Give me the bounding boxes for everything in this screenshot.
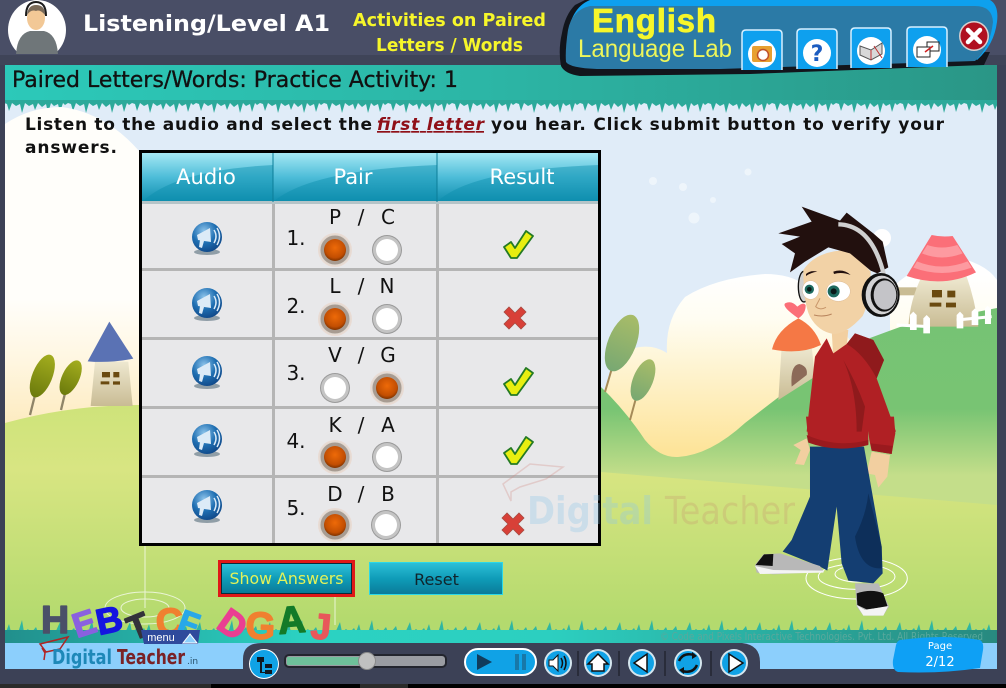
menu tab: menu: [147, 632, 175, 644]
pair letters and numbers: /: [358, 274, 365, 298]
icon: previous: [628, 649, 656, 677]
top teal title band: [5, 65, 997, 100]
table header: Audio: [176, 165, 236, 189]
icon: folder clock: [748, 40, 776, 68]
icon: close: [959, 21, 989, 51]
logo: Digital Teacher: [40, 637, 198, 669]
panel: English Language Lab toolbar: [560, 0, 997, 76]
pair letters and numbers: /: [358, 343, 365, 367]
character legs and shoes: [755, 417, 907, 616]
table header: Pair: [333, 165, 373, 189]
result marks: [502, 231, 533, 535]
play and pause pill: [465, 649, 536, 675]
pair letters and numbers: [286, 205, 396, 520]
audio buttons: [192, 222, 222, 523]
nav separators: [578, 651, 711, 676]
brand: Language Lab: Language Lab: [578, 35, 732, 63]
pair letters and numbers: B: [381, 482, 395, 506]
scenery: orange roof house: [772, 302, 821, 400]
pair letters and numbers: 1.: [286, 226, 306, 250]
decorative alphabet letters: T: [122, 605, 155, 648]
decorative alphabet letters: C: [154, 601, 185, 645]
watermark: Digital Teacher: [503, 464, 795, 533]
instruction text: you hear. Click submit button to verify your: [491, 115, 945, 135]
logo: Digital Teacher: Digital: [52, 645, 112, 669]
icon: next: [720, 649, 748, 677]
avatar icon: listener with headphones: [8, 0, 66, 60]
pair letters and numbers: /: [358, 205, 365, 229]
decorative alphabet letters: F: [174, 603, 204, 643]
pair letters and numbers: 5.: [286, 496, 306, 520]
heading: level: Listening/Level A1: [83, 12, 330, 37]
logo: Digital Teacher: .in: [187, 657, 198, 667]
decorative alphabet letters: J: [309, 605, 333, 648]
instruction text: first letter: [377, 115, 486, 135]
icicle fringe: [5, 100, 997, 114]
pair letters and numbers: C: [381, 205, 395, 229]
pair letters and numbers: G: [380, 343, 396, 367]
title: practice activity: Paired Letters/Words: Practice Activity: 1: [12, 68, 458, 93]
pair letters and numbers: A: [381, 413, 395, 437]
page counter badge: [893, 637, 983, 672]
character torso and head: [778, 207, 900, 432]
pair letters and numbers: V: [328, 343, 342, 367]
character: boy with headphones: [755, 207, 907, 616]
button: show answers: [218, 560, 355, 597]
logo: Digital Teacher: Teacher: [117, 645, 185, 669]
instruction text: answers.: [25, 138, 117, 158]
decorative alphabet letters: B: [92, 597, 126, 643]
heading: activity topic: Activities on Paired: [353, 10, 546, 31]
pair letters and numbers: 4.: [286, 429, 306, 453]
brand: English: English: [592, 2, 716, 39]
button: show answers: Show Answers: [230, 569, 344, 588]
watermark: Digital Teacher: Digital: [527, 489, 653, 533]
icon: help: ?: [811, 42, 823, 67]
instruction text: Listen to the audio and select the: [25, 115, 372, 135]
icon: window resize: [913, 36, 941, 64]
scenery: clouds and hills: [5, 107, 997, 640]
decorative alphabet letters: D: [210, 600, 255, 648]
heading: activity topic: Letters / Words: [376, 35, 523, 56]
menu tab: [141, 630, 200, 644]
pair letters and numbers: N: [380, 274, 394, 298]
table: audio / pair / result: [139, 150, 601, 546]
icon: refresh: [674, 649, 702, 677]
pair letters and numbers: L: [329, 274, 341, 298]
footer grass and band: [0, 612, 1006, 684]
table header: [142, 153, 598, 204]
icon: open book: [857, 37, 885, 65]
watermark: Digital Teacher: Teacher: [664, 489, 795, 533]
button: reset: Reset: [414, 570, 459, 589]
page counter badge: Page: [928, 641, 952, 652]
progress slider: [285, 652, 446, 670]
icon: volume: [544, 649, 572, 677]
icon: help: [803, 39, 831, 67]
ground rings under table: [105, 546, 335, 625]
decorative alphabet letters: G: [245, 605, 276, 649]
table grid: [142, 204, 598, 543]
button: reset: [370, 562, 502, 594]
pair letters and numbers: /: [358, 482, 365, 506]
instruction text: [25, 115, 945, 158]
radio buttons: [318, 233, 404, 542]
icon: home: [584, 649, 612, 677]
decorative alphabet letters: E: [68, 602, 101, 646]
pair letters and numbers: /: [358, 413, 365, 437]
navigation bar: [243, 643, 760, 683]
pair letters and numbers: 3.: [286, 361, 306, 385]
pair letters and numbers: 2.: [286, 294, 306, 318]
table header: Result: [490, 165, 554, 189]
decorative alphabet letters: A: [276, 599, 307, 643]
scenery: right striped roof house: [897, 235, 992, 333]
scenery: trees right of table: [598, 310, 661, 420]
icon: contents tree: [249, 649, 279, 679]
page counter badge: 2/12: [925, 655, 955, 670]
pair letters and numbers: D: [327, 482, 343, 506]
decorative alphabet letters: [41, 597, 333, 649]
pair letters and numbers: K: [328, 413, 342, 437]
pair letters and numbers: P: [329, 205, 341, 229]
header bar: [0, 0, 1006, 65]
decorative alphabet letters: H: [41, 599, 69, 642]
heading: activity topic: [353, 10, 546, 56]
scenery: left trees and blue roof house: [25, 322, 133, 415]
toolbar tabs: [742, 27, 947, 70]
